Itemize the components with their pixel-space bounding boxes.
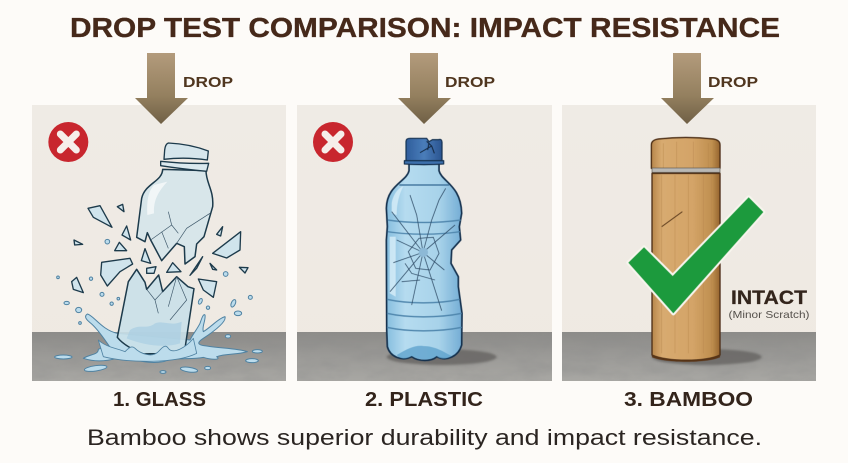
impact cracks: [390, 188, 455, 311]
intact label: (Minor Scratch): [728, 309, 810, 321]
drop arrow 2: [398, 53, 451, 124]
icon: red cross: [48, 122, 88, 162]
label: glass: 1. GLASS: [113, 389, 206, 411]
label: plastic: 2. PLASTIC: [365, 389, 483, 411]
impact point: [419, 248, 428, 257]
broken bottle lower part: [117, 269, 194, 354]
bottle base water: [397, 346, 452, 359]
bamboo flask: [651, 137, 720, 362]
water surface and ribs: [387, 185, 462, 331]
label: bamboo: 3. BAMBOO: [624, 389, 753, 411]
icon: green check mark: [628, 197, 763, 313]
drop label 2: DROP: [445, 74, 495, 91]
bottle highlights: [390, 186, 403, 297]
panel: plastic: [297, 105, 552, 381]
drop label 3: DROP: [708, 74, 758, 91]
drop arrow 1: [135, 53, 188, 124]
bottle shadow: [387, 349, 497, 365]
plastic cap: [404, 138, 444, 165]
broken bottle upper part: [137, 143, 213, 264]
intact label: INTACT: [731, 288, 807, 309]
caption: Bamboo shows superior durability and impact resistance.: [87, 425, 762, 450]
icon: red cross: [313, 122, 353, 162]
glass shards: [72, 204, 248, 297]
bottle shadow: [652, 349, 762, 365]
drop arrow 3: [661, 53, 714, 124]
plastic bottle body: [386, 164, 462, 360]
panel: glass: [32, 105, 286, 381]
title: DROP TEST COMPARISON: IMPACT RESISTANCE: [70, 12, 780, 43]
intact label: [728, 288, 810, 321]
drop label 1: DROP: [183, 74, 233, 91]
panel: bamboo: [562, 105, 816, 381]
water splash over the bottle base: [98, 338, 197, 361]
glass splash: [55, 239, 262, 373]
